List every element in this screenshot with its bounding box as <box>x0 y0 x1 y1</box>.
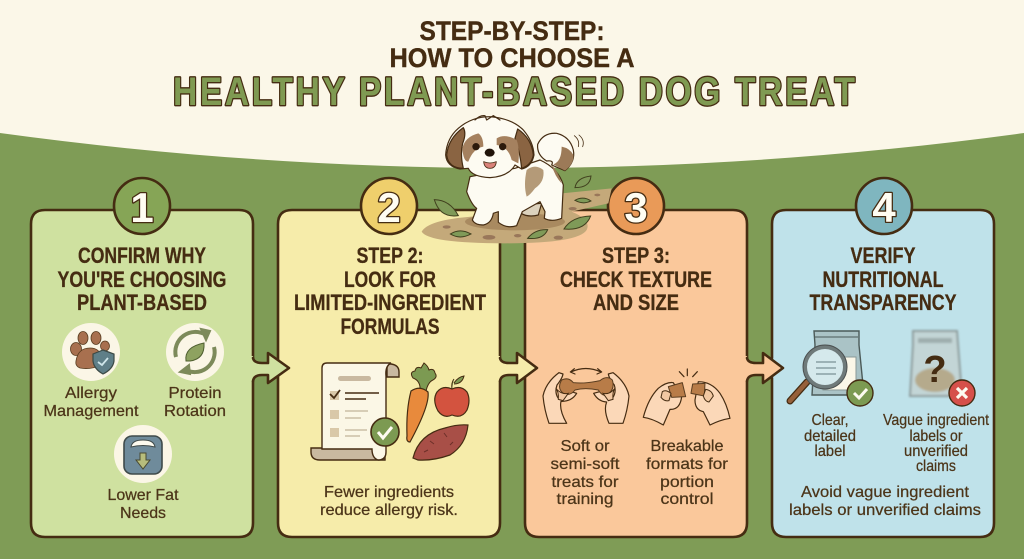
label: detailed <box>804 428 856 445</box>
heading: LOOK FOR <box>344 267 436 292</box>
text <box>320 484 458 519</box>
text: labels or unverified claims <box>789 502 981 519</box>
label <box>164 385 226 420</box>
text <box>550 438 620 508</box>
label: label <box>814 443 846 460</box>
text: formats for <box>646 456 729 473</box>
arrow: step 2 to 3 <box>495 353 537 383</box>
badge 2: 2 <box>377 184 401 231</box>
badge 2 <box>361 178 417 234</box>
label <box>108 487 179 522</box>
right ear <box>515 129 533 168</box>
icon: vague bag <box>910 331 975 406</box>
label: Rotation <box>164 403 226 420</box>
label: Needs <box>120 505 166 522</box>
arrow: step 3 to 4 <box>742 353 783 383</box>
icon: checklist scroll <box>311 363 399 460</box>
heading: VERIFY <box>850 243 916 268</box>
label: Lower Fat <box>108 487 179 504</box>
label: Vague ingredient <box>883 412 989 429</box>
icon: clear label bag with magnifier <box>790 331 873 406</box>
nose <box>485 149 495 157</box>
heading: AND SIZE <box>593 290 679 315</box>
heading: CONFIRM WHY <box>78 243 206 268</box>
dog head <box>446 117 534 178</box>
badge 1: 1 <box>130 184 154 231</box>
label: labels or <box>910 428 963 445</box>
label: claims <box>916 458 956 475</box>
panel: step 4 <box>772 178 994 537</box>
brown patch <box>525 167 544 197</box>
title <box>173 16 855 114</box>
text: treats for <box>552 474 619 491</box>
ground with leaves <box>422 176 612 243</box>
left eye patch <box>462 133 483 162</box>
badge 4: 4 <box>872 184 896 231</box>
heading: FORMULAS <box>340 314 440 339</box>
label: Clear, <box>812 412 848 429</box>
icon: paw with shield <box>62 323 120 381</box>
badge 3: 3 <box>624 184 648 231</box>
label: Management <box>44 403 139 420</box>
heading <box>810 243 957 315</box>
heading <box>294 243 486 339</box>
panel: step 3 <box>525 178 747 537</box>
heading: STEP 2: <box>356 243 424 268</box>
right eye patch <box>497 136 519 163</box>
illustration: dog <box>446 116 583 227</box>
icon: apple <box>435 376 469 416</box>
icon: scale <box>114 425 172 483</box>
text: Avoid vague ingredient <box>801 484 970 501</box>
heading: STEP 3: <box>602 243 670 268</box>
text: Breakable <box>650 438 724 455</box>
rear patch <box>552 165 562 183</box>
tongue <box>484 162 496 168</box>
icon: carrot <box>407 363 436 442</box>
text: reduce allergy risk. <box>320 502 458 519</box>
heading: YOU'RE CHOOSING <box>58 267 226 292</box>
heading: PLANT-BASED <box>77 290 207 315</box>
dog body <box>467 160 563 227</box>
label: Allergy <box>65 385 117 402</box>
panel: step 2 <box>278 178 500 537</box>
left ear <box>447 128 465 168</box>
title: HOW TO CHOOSE A <box>390 43 634 73</box>
icon: rotation arrows with leaf <box>166 323 224 381</box>
head tuft <box>475 116 500 120</box>
heading <box>58 243 226 315</box>
text <box>789 484 981 519</box>
badge 3 <box>608 178 664 234</box>
icon: hands breaking treat <box>643 369 730 425</box>
far leg shadow <box>521 203 542 216</box>
arrow: step 1 to 2 <box>248 353 289 383</box>
eyes <box>472 143 506 150</box>
label <box>44 385 139 420</box>
icon: vague bag: ? <box>923 349 947 391</box>
text: Soft or <box>560 438 610 455</box>
heading: TRANSPARENCY <box>810 290 957 315</box>
heading <box>560 243 712 315</box>
heading: LIMITED-INGREDIENT <box>294 290 486 315</box>
title: STEP-BY-STEP: <box>420 16 604 46</box>
label <box>883 412 989 475</box>
title: HEALTHY PLANT-BASED DOG TREAT <box>173 69 855 114</box>
icon: sweet potato <box>413 425 468 460</box>
tail wag marks <box>574 135 583 147</box>
text: training <box>556 491 614 508</box>
text <box>646 438 729 508</box>
heading: NUTRITIONAL <box>822 267 944 292</box>
badge 1 <box>114 178 170 234</box>
icon: hands bending soft treat <box>543 368 629 423</box>
badge 4 <box>856 178 912 234</box>
panel: step 1 <box>31 178 253 537</box>
text: portion <box>660 474 714 491</box>
text: Fewer ingredients <box>324 484 454 501</box>
label: Protein <box>168 385 222 402</box>
heading: CHECK TEXTURE <box>560 267 712 292</box>
label <box>804 412 856 460</box>
dog tail <box>538 133 574 171</box>
label: unverified <box>904 443 968 460</box>
text: semi-soft <box>550 456 620 473</box>
text: control <box>660 491 714 508</box>
